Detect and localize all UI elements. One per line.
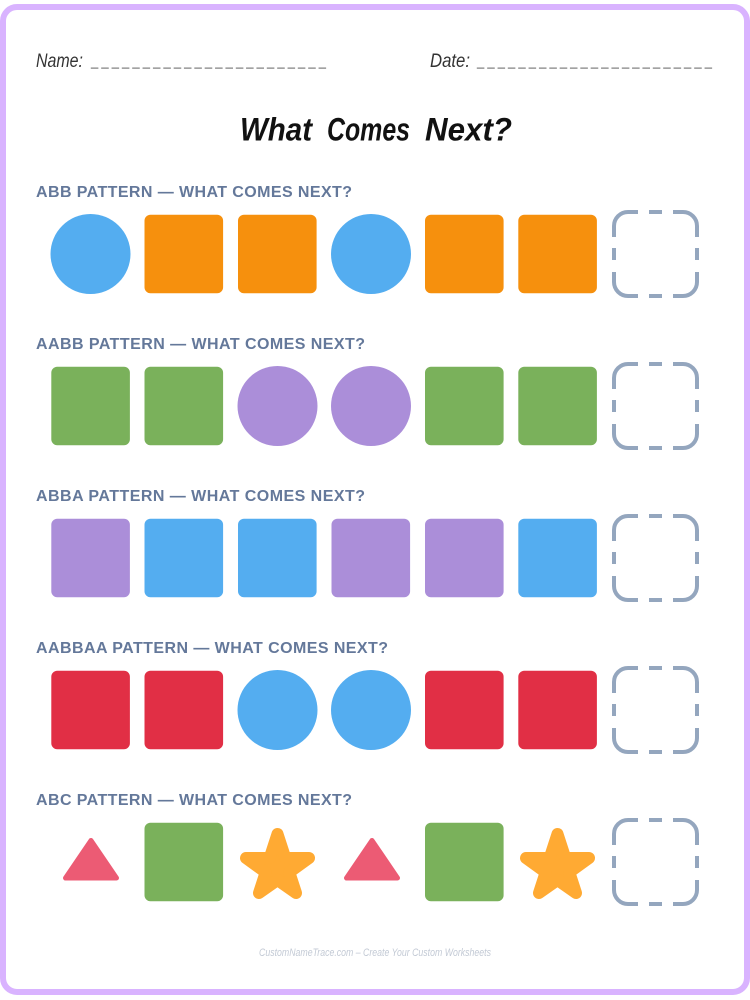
footer: CustomNameTrace.com – Create Your Custom Worksheets [259,947,491,959]
date field [430,51,713,72]
panel: AABB pattern [36,336,697,448]
answer box: AABBAA [614,668,697,752]
pattern shapes: ABB [50,214,597,294]
heading: AABB: AABB PATTERN — WHAT COMES NEXT? [36,336,365,353]
date field: _______________________ [476,54,713,69]
pattern shapes: ABBA [51,519,597,597]
answer box: AABB [614,364,697,448]
name field [36,51,327,72]
name field: Name: [36,51,83,72]
pattern shapes: AABBAA [51,670,597,750]
answer box: ABBA [614,516,697,600]
name field: _______________________ [90,54,327,69]
heading: ABBA: ABBA PATTERN — WHAT COMES NEXT? [36,488,365,505]
title: What [240,112,313,148]
panel: ABC pattern [36,792,697,904]
date field: Date: [430,51,470,72]
panel: AABBAA pattern [36,640,697,752]
panel: ABB pattern [36,184,697,296]
heading: ABC: ABC PATTERN — WHAT COMES NEXT? [36,792,352,809]
panel: ABBA pattern [36,488,697,600]
title: Comes [327,112,410,148]
pattern shapes: ABC [66,823,589,901]
answer box: ABC [614,820,697,904]
pattern shapes: AABB [51,366,597,446]
answer box: ABB [614,212,697,296]
heading: AABBAA: AABBAA PATTERN — WHAT COMES NEXT? [36,640,388,657]
heading: ABB: ABB PATTERN — WHAT COMES NEXT? [36,184,352,201]
title: Next? [425,112,512,148]
